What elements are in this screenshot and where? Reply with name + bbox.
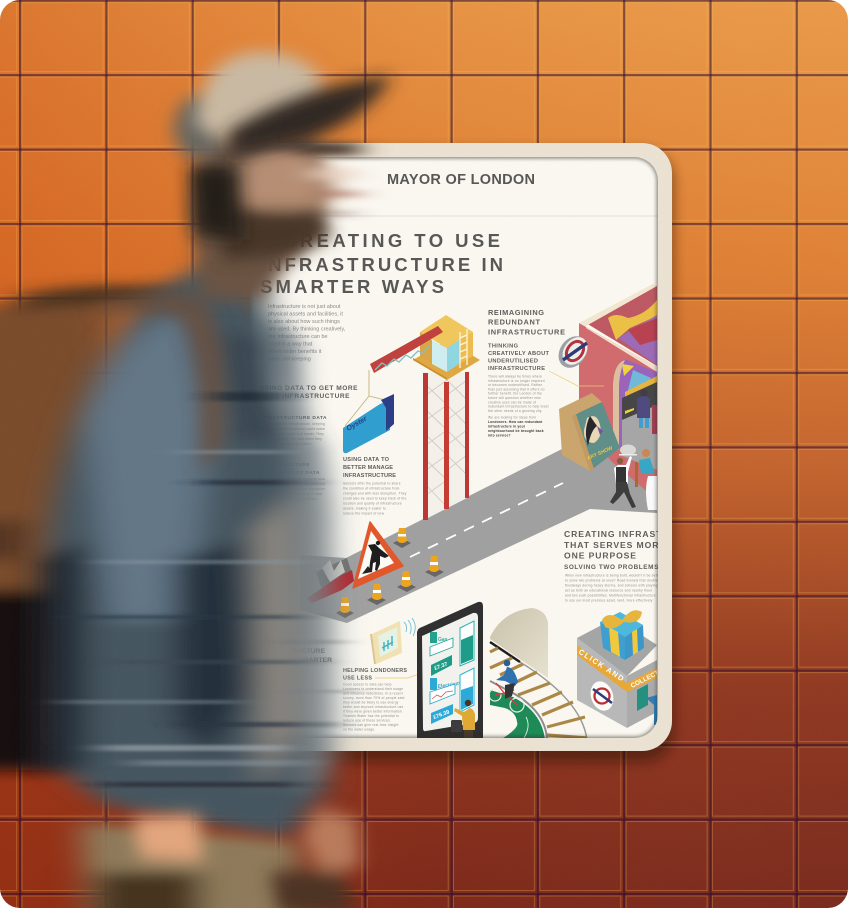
text: helping londoners body: Good access to data can help [343, 682, 392, 686]
roadworks warning sign [353, 522, 403, 588]
main title [260, 234, 502, 293]
head and face [174, 52, 392, 300]
text: using data body: Sensors offer the potential to share [343, 482, 401, 486]
text: using data body: assets, making it easier to [343, 506, 386, 510]
text: reimagining body: There will always be times where [488, 374, 542, 378]
oyster card [343, 394, 394, 453]
hands [133, 808, 360, 908]
heading: creating infrastructure [564, 531, 658, 558]
left section heading fragments: INFRASTRUCTURE [262, 648, 325, 655]
oyster card: Oyster [346, 415, 369, 433]
heading: creating infrastructure: ONE PURPOSE [564, 550, 637, 560]
subheading: solving two problems: SOLVING TWO PROBLEMS AT ONCE [564, 564, 694, 571]
text: helping londoners body: survey, more than 70% of people said [343, 696, 405, 700]
tower legs [423, 372, 469, 520]
text: reimagining body: infrastructure in your [488, 424, 526, 428]
text: reimagining body [488, 374, 549, 438]
heading: helping londoners: HELPING LONDONERS [343, 668, 407, 674]
text: using data body [343, 482, 407, 516]
text: helping londoners body: and influence reductions. In a recent [343, 692, 403, 696]
traffic cones [336, 528, 444, 618]
heading: creating infrastructure: THAT SERVES MORE THAN [564, 540, 697, 550]
text: infrastructure data body: help avoid future disruption [280, 487, 325, 491]
text: helping londoners body: on the water usage. [343, 728, 375, 732]
green cycle path [490, 690, 545, 740]
heading: using data [262, 386, 358, 474]
man using tablet [454, 700, 475, 740]
waiter figure [610, 444, 637, 508]
text: reimagining body: redundant infrastructure to help meet [488, 405, 549, 409]
click and collect kiosk: CLICK AND [577, 647, 626, 683]
trousers [80, 822, 300, 908]
left section heading fragments [303, 648, 332, 662]
header logo text: MAYOR OF LONDON [387, 172, 535, 188]
left section heading fragments: THAT'S SMARTER [273, 657, 332, 664]
text: reimagining body: neighbourhood be brought back [488, 429, 544, 433]
text: infrastructure data body [283, 422, 325, 500]
text: solving problems body: When new infrastructure is being built, wouldn't it be better [565, 574, 662, 578]
text: using data body: reduce the impact of new [343, 512, 385, 516]
backpack [0, 286, 190, 770]
heading: creating infrastructure: CREATING INFRASTRUCTURE [564, 529, 711, 539]
callout line to tablet [375, 674, 417, 678]
text: infrastructure data body: across many sectors. [283, 497, 318, 501]
heading: reimagining: INFRASTRUCTURE [488, 328, 565, 336]
subheading: thinking creatively: UNDERUTILISED [488, 358, 538, 364]
text: infrastructure data body: The way that infrastructure, keeping [266, 422, 325, 426]
text: solving problems body: and two such possibilities. Multifunctional infrastructure [565, 594, 656, 598]
seated diner and table [635, 449, 657, 510]
art show A-frame sign [559, 393, 620, 471]
intro text [267, 304, 346, 362]
backpack strap [95, 291, 225, 470]
cyclist [489, 660, 524, 712]
text: solving problems body: floodways during heavy storms, and schools with playing [565, 584, 658, 588]
heading: reimagining: REIMAGINING [488, 308, 544, 317]
text: helping londoners body: Thames Water has the potential to [343, 714, 399, 718]
heading: using data: INFRASTRUCTURE DATA [259, 415, 327, 421]
intro text: are used. By thinking creatively, [268, 326, 346, 332]
text: infrastructure data body: are used by others. [280, 442, 312, 446]
text: using data body: changes and with less disruption. They [343, 492, 407, 496]
heading: helping londoners [343, 668, 407, 680]
intro text: physical assets and facilities, it [268, 312, 343, 318]
callout line to building [549, 371, 604, 386]
neck and head underlay [190, 135, 322, 300]
smart meter box [370, 618, 415, 664]
crane cable [345, 370, 385, 426]
text: infrastructure data body: track of infrastructure could make [270, 427, 325, 431]
tablet with usage data: £76.39 [433, 709, 450, 721]
poster frame [250, 143, 674, 762]
label: using data: INFRASTRUCTURE [343, 473, 396, 479]
heading: using data: SENSOR DATA [280, 470, 320, 476]
text: helping londoners body: Sensors can give real-time insight [343, 723, 399, 727]
text: reimagining body: into service? [488, 434, 511, 438]
text: reimagining body: We are looking for ideas from [488, 416, 536, 420]
heading: using data: OUT OF OUR INFRASTRUCTURE [233, 393, 350, 400]
cap side [174, 96, 226, 160]
label: using data [343, 457, 396, 479]
crane arm [370, 326, 443, 373]
commuter in station [637, 390, 657, 434]
kiosk roundel [587, 678, 617, 714]
heading: reimagining [488, 310, 565, 334]
tower platform and cabin [413, 315, 480, 380]
text: reimagining body: the other needs of a growing city. [488, 409, 542, 413]
main title: SMARTER WAYS [260, 276, 444, 297]
hair [190, 165, 242, 240]
label: using data: BETTER MANAGE [343, 465, 393, 471]
tunnel arch [490, 608, 548, 678]
text: reimagining body: than just assuming that it offers no [488, 387, 545, 391]
text: using data body: location and quality of infrastructure [343, 502, 402, 506]
subheading: thinking creatively: INFRASTRUCTURE [488, 366, 545, 372]
subheading: thinking creatively: THINKING [488, 344, 519, 350]
heading: reimagining: REDUNDANT [488, 318, 540, 326]
text: reimagining body: further benefit, the London of the [488, 392, 542, 396]
text: using data body: the condition of infrastructure from [343, 486, 400, 490]
label: using data: USING DATA TO [343, 457, 390, 463]
text: reimagining body: infrastructure is no longer required [488, 379, 545, 383]
road surface [308, 441, 657, 623]
blur edge fading over poster [262, 320, 352, 800]
tablet with usage data: Electricity [437, 681, 462, 690]
text: helping londoners body: reduce use of these services. [343, 718, 391, 722]
intro text: while still keeping [267, 356, 311, 362]
heading: helping londoners: USE LESS [343, 676, 372, 682]
heading: using data: USING DATA TO GET MORE [259, 385, 358, 392]
beard [222, 212, 332, 262]
inner screen shadow [249, 156, 659, 739]
railway track [490, 642, 587, 740]
text: reimagining body: Londoners. How can redundant [488, 420, 543, 424]
gift on kiosk [600, 610, 644, 660]
intro text: used in a way that [268, 342, 313, 348]
text: reimagining body: creative uses can be made of [488, 400, 536, 404]
cap brim [228, 76, 392, 156]
click and collect kiosk [577, 618, 660, 728]
subheading: thinking creatively [488, 344, 550, 372]
poster screen [250, 157, 658, 738]
text: reimagining body: future will question whether new [488, 396, 541, 400]
text: infrastructure data body: Data can be used to measure how [269, 477, 325, 481]
text: using data body: could also be used to keep track of the [343, 496, 406, 500]
main title: INFRASTRUCTURE IN [260, 254, 503, 275]
click and collect kiosk: COLLECT [630, 670, 660, 690]
station building [579, 284, 657, 500]
text: helping londoners body [343, 682, 405, 732]
text: infrastructure data body: could help with data when they [272, 437, 322, 441]
main title: CREATING TO USE [283, 230, 500, 251]
denim jacket [40, 258, 326, 838]
intro text: our infrastructure can be [268, 334, 328, 340]
cap crown [196, 52, 326, 142]
tablet with usage data [417, 602, 483, 745]
text: solving problems body: to solve two problems at once? Road tunnels that double as [565, 578, 663, 582]
road centre dashes [410, 483, 563, 557]
tablet with usage data: £7.37 [434, 662, 449, 672]
motion streaks [60, 392, 355, 787]
underground roundel sign [558, 336, 588, 368]
text: solving problems body [565, 574, 663, 602]
blurred passer-by [0, 52, 392, 908]
intro text: is also about how such things [268, 319, 340, 325]
text: infrastructure data body: infrastructure is being used and [273, 482, 325, 486]
red tunnelling drill [307, 558, 354, 603]
text: infrastructure data body: assets work harder and easier. They [265, 432, 324, 436]
subheading: thinking creatively: CREATIVELY ABOUT [488, 351, 550, 357]
text: solving problems body: act as both an educational resource and nearby flood [565, 588, 652, 592]
text: reimagining body: or becomes underutilised. Rather [488, 383, 543, 387]
intro text: offers wider benefits it [268, 349, 322, 355]
text: helping londoners body: they would be likely to use energy [343, 700, 399, 704]
text: helping londoners body: if they were given better information. [343, 710, 403, 714]
text: helping londoners body: Londoners to understand their usage [343, 687, 403, 691]
crane and tower [345, 315, 480, 520]
text: helping londoners body: better and improve infrastructure use [343, 705, 404, 709]
text: infrastructure data body: with better sharing of data [279, 492, 322, 496]
text: solving problems body: to use our most precious asset, land, more effectively [565, 598, 653, 602]
intro text: Infrastructure is not just about [268, 304, 341, 310]
art show A-frame sign: ART SHOW [586, 445, 614, 462]
heading: using data: INFRASTRUCTURE [259, 462, 310, 468]
tablet with usage data: Gas [438, 637, 448, 643]
